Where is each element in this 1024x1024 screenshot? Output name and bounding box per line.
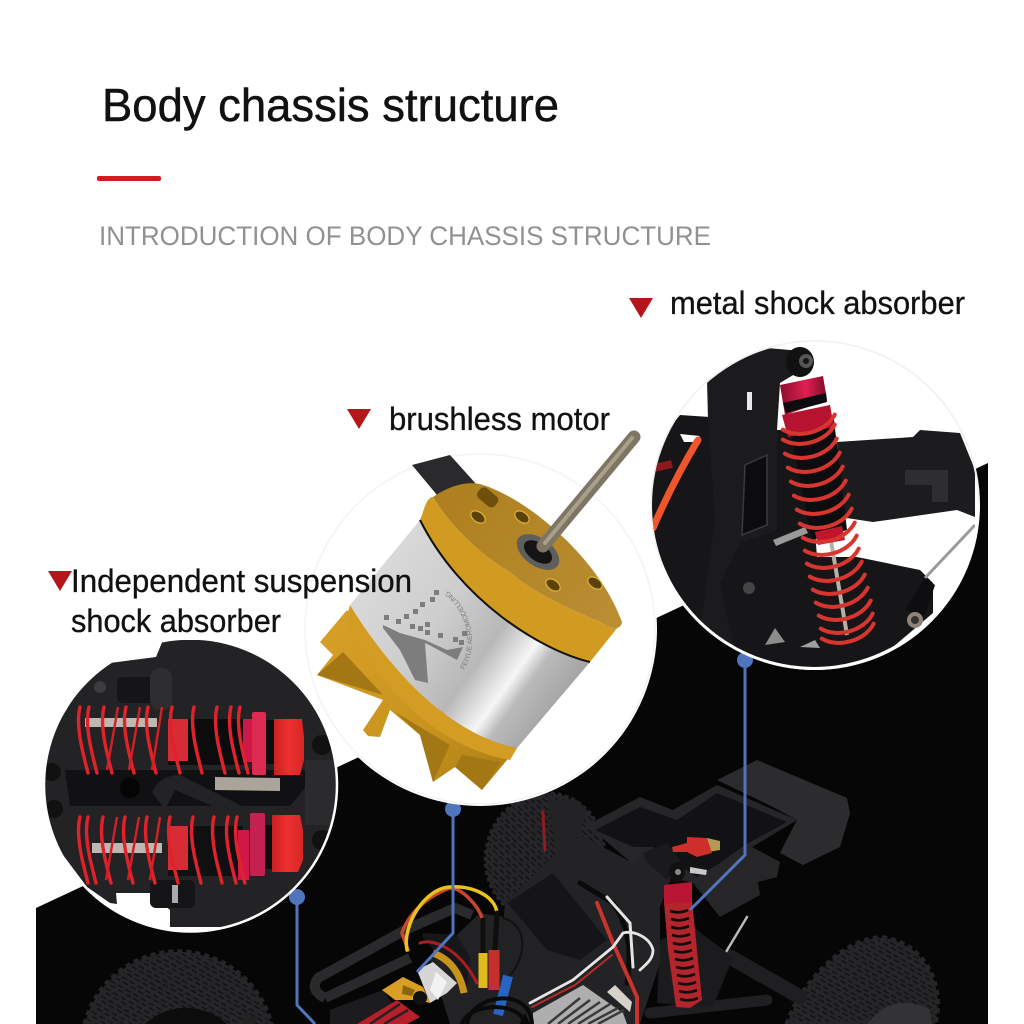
orange wire: [653, 440, 698, 528]
label: independent suspension shock absorber: Independent suspension: [71, 563, 412, 599]
main chassis body: [500, 835, 677, 1024]
wires: [402, 812, 653, 1024]
silver motor body: [350, 520, 590, 748]
black diagonal background: [36, 463, 988, 1024]
tire post: [547, 800, 587, 853]
spring coils: [782, 415, 877, 648]
fin shadows: [317, 652, 500, 790]
motor housing: [423, 933, 470, 987]
chassis shock absorber: [664, 862, 702, 1008]
center details: [43, 735, 337, 850]
silver fitting: [215, 777, 280, 791]
ball joint: [905, 578, 935, 628]
motor fins: [317, 610, 517, 790]
front right tire: [787, 938, 938, 1024]
chassis photo: [85, 760, 938, 1024]
damper: [790, 420, 847, 540]
motor compartment: [430, 914, 525, 1024]
lower knob: [150, 880, 195, 908]
panel: left suspension circle: [40, 638, 345, 932]
knurled collar: [782, 405, 834, 437]
frame loop: [315, 908, 472, 998]
subtitle: INTRODUCTION OF BODY CHASSIS STRUCTURE: [99, 221, 711, 251]
collar band: [783, 393, 827, 413]
tray interior: [595, 793, 787, 877]
mounting holes: [469, 485, 604, 594]
rear compartment: [507, 873, 607, 960]
label: independent suspension shock absorber: shock absorber: [71, 603, 281, 639]
battery tray: [587, 785, 797, 917]
suspension arms: [650, 917, 800, 1013]
gold rim: [420, 497, 622, 662]
connector block: [607, 985, 632, 1012]
battery tray: [837, 430, 975, 522]
white notch: [680, 434, 700, 442]
motor wire: [412, 455, 477, 500]
leader line: suspension: [289, 889, 315, 1024]
motor logo: FEIYUE AEROMODELLING: [446, 592, 472, 670]
bottom shock absorber: [79, 813, 303, 883]
leader line: motor: [417, 801, 461, 972]
tower window: [742, 455, 767, 535]
shaft hub: [510, 527, 566, 577]
panel: motor circle: [304, 430, 657, 806]
motor logo: [383, 590, 472, 683]
lower detail: [743, 582, 820, 648]
leader line: metal shock: [690, 652, 753, 910]
panel: right shock circle: [640, 340, 980, 680]
top shock absorber: [79, 707, 304, 775]
right circle ring: [662, 505, 978, 668]
tower slot: [747, 392, 752, 410]
chassis silhouette: [40, 640, 345, 927]
label: metal shock absorber: metal shock absorber: [670, 285, 965, 321]
tray peg: [905, 470, 948, 502]
T connector: [643, 837, 720, 880]
upper frame tower: [707, 348, 793, 430]
rear tire: [484, 792, 606, 906]
rod: [925, 525, 975, 578]
lower red collar: [815, 526, 845, 545]
glare: [773, 527, 808, 546]
black seam: [420, 520, 590, 662]
top bolt: [786, 347, 814, 377]
title: Body chassis structure: [102, 79, 559, 131]
red accent bar: [97, 176, 161, 181]
frame plate: [330, 990, 392, 1024]
bottom gold ring: [345, 605, 517, 760]
motor top face: [433, 483, 622, 628]
red reservoir cap: [780, 376, 827, 415]
lower chassis: [640, 415, 933, 680]
small motor: [382, 953, 464, 1003]
front shock and spring: [357, 991, 427, 1024]
battery block: [717, 760, 850, 865]
lower right chassis: [657, 927, 733, 1007]
heat sink: [533, 985, 627, 1024]
label: brushless motor: brushless motor: [389, 401, 610, 437]
shaft: [830, 535, 847, 635]
upper knob: [94, 668, 172, 710]
front left tire: [85, 952, 271, 1024]
label: independent suspension shock absorber: [48, 563, 412, 639]
motor shaft: [543, 437, 634, 546]
white ring: [44, 638, 337, 932]
